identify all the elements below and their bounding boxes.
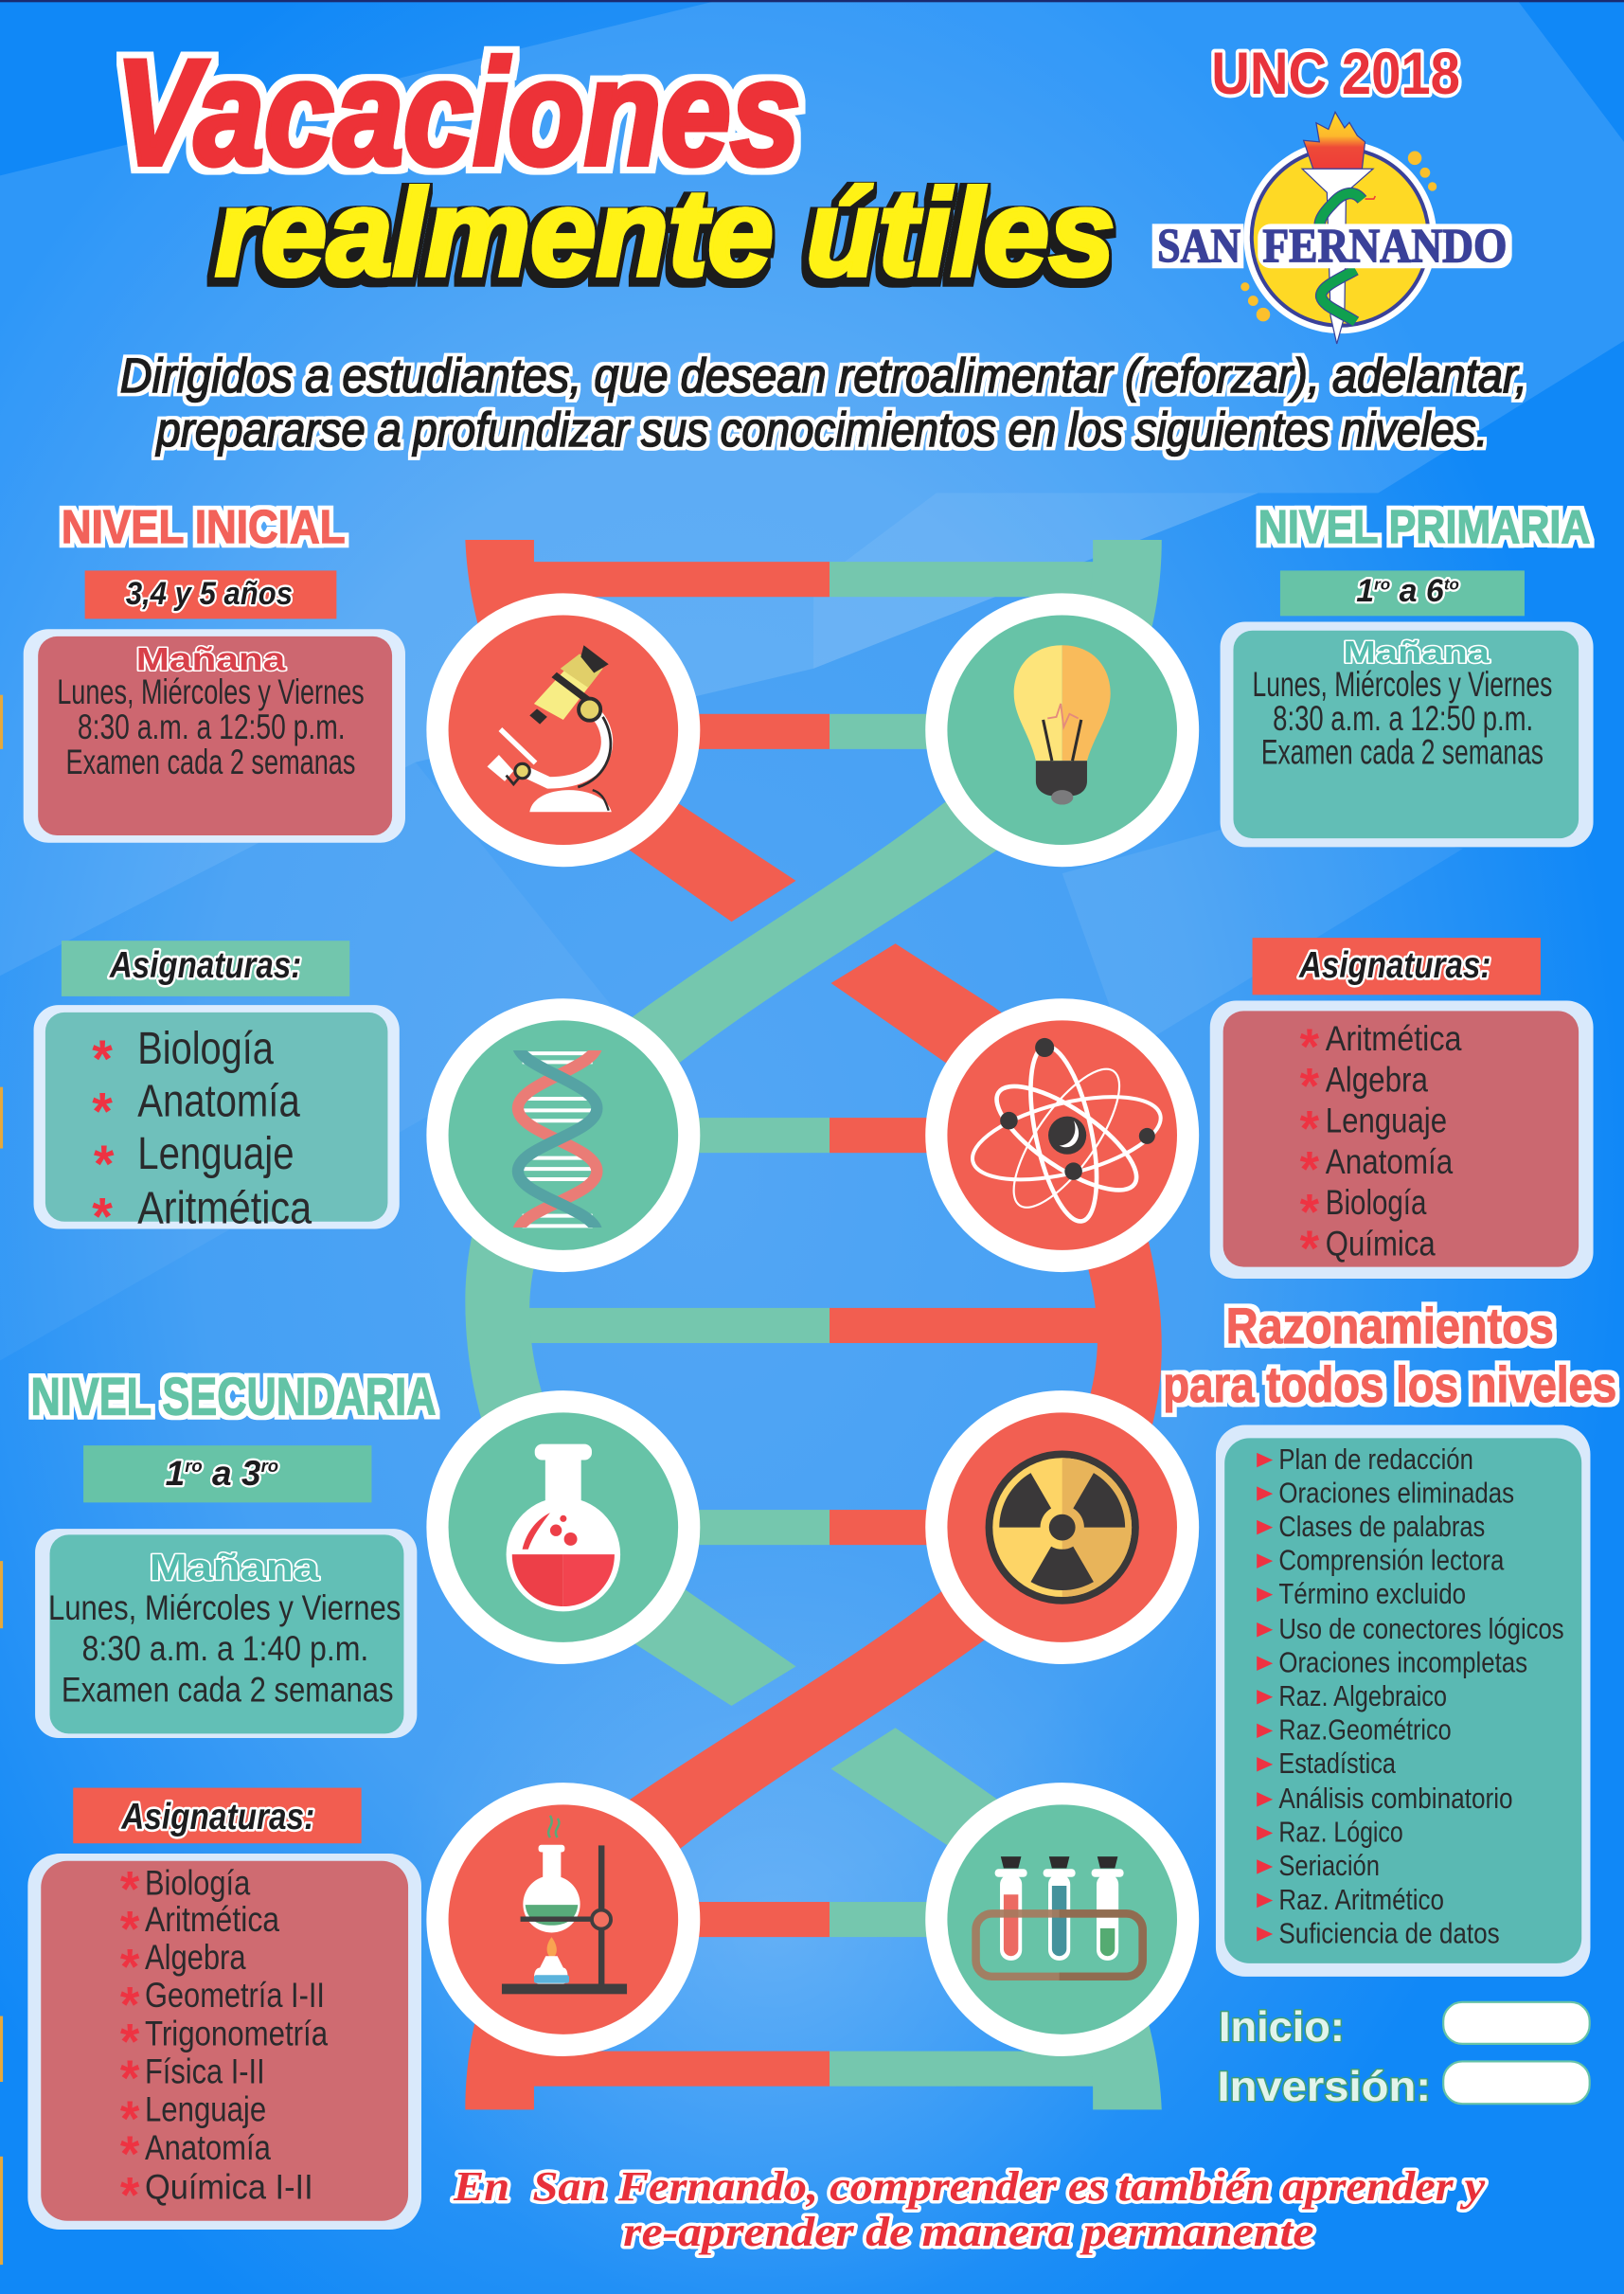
asignaturas band: Asignaturas: <box>120 1797 314 1837</box>
reasoning list card: Comprensión lectora <box>1278 1543 1505 1576</box>
schedule card: 8:30 a.m. a 12:50 p.m. <box>1273 698 1533 738</box>
grade band: ro <box>1374 575 1390 593</box>
icon: test tubes <box>937 1794 1188 2045</box>
subject list card: * <box>1300 1101 1320 1156</box>
age band: 3,4 y 5 años <box>126 576 293 612</box>
heading: razonamientos: Razonamientos <box>1226 1299 1554 1354</box>
schedule card <box>35 1529 417 1738</box>
panel: razonamientos <box>1163 1299 1616 1977</box>
panel: nivel primaria <box>1210 501 1594 1279</box>
logo: San Fernando: FERNANDO <box>1262 220 1507 273</box>
subject list card: Lenguaje <box>1326 1101 1447 1140</box>
schedule card: Examen cada 2 semanas <box>62 1669 394 1709</box>
asignaturas band <box>62 941 349 996</box>
icon: radiation <box>937 1402 1188 1653</box>
schedule card: Mañana <box>1343 636 1490 670</box>
age band <box>85 570 336 618</box>
title: Vacaciones: Vacaciones <box>116 29 800 196</box>
subject list card: * <box>1300 1185 1320 1240</box>
grade band: ro <box>261 1456 278 1476</box>
grade band: 1 <box>1356 573 1374 609</box>
subject list card: * <box>92 1030 113 1088</box>
reasoning list card: Oraciones eliminadas <box>1278 1476 1514 1509</box>
subject list card: Biología <box>137 1024 274 1074</box>
heading: nivel secundaria: NIVEL SECUNDARIA <box>30 1368 436 1426</box>
asignaturas band: Asignaturas: <box>109 945 301 986</box>
subject list card: Geometría I-II <box>145 1975 325 2015</box>
reasoning list card: Estadística <box>1278 1747 1397 1780</box>
reasoning list card: Raz. Aritmético <box>1278 1883 1444 1916</box>
subject list card: Aritmética <box>1326 1018 1462 1058</box>
asignaturas band <box>73 1788 362 1843</box>
title: realmente útiles: realmente útiles <box>215 165 1115 301</box>
icon: distillation setup <box>437 1794 689 2045</box>
reasoning list card: Plan de redacción <box>1278 1443 1473 1476</box>
subject list card: * <box>92 1082 113 1140</box>
reasoning list card: Uso de conectores lógicos <box>1278 1612 1564 1645</box>
subject list card: Anatomía <box>145 2127 271 2167</box>
subject list card: * <box>120 2168 140 2223</box>
heading: nivel inicial: NIVEL INICIAL <box>62 501 346 553</box>
subject list card: Física I-II <box>145 2052 265 2091</box>
icon: DNA <box>437 1010 689 1261</box>
schedule card: 8:30 a.m. a 12:50 p.m. <box>78 707 346 746</box>
grade band <box>1280 570 1525 616</box>
reasoning list card: Clases de palabras <box>1278 1510 1485 1543</box>
schedule card: Mañana <box>150 1548 319 1588</box>
subject list card: Lenguaje <box>137 1129 294 1179</box>
subject list card: * <box>1300 1019 1320 1075</box>
subject list card: Aritmética <box>145 1899 279 1939</box>
panel: nivel inicial <box>24 501 405 1246</box>
field: inversión <box>1217 2061 1590 2110</box>
reasoning list card <box>1216 1425 1590 1977</box>
subject list card: Algebra <box>1326 1059 1428 1099</box>
subject list card: * <box>1300 1142 1320 1198</box>
reasoning list card: Raz. Algebraico <box>1278 1679 1447 1712</box>
subtitle text: prepararse a profundizar sus conocimientos en los siguientes niveles. <box>155 403 1488 457</box>
reasoning list card: Seriación <box>1278 1849 1380 1882</box>
subject list card: * <box>120 2051 140 2106</box>
schedule card: Lunes, Miércoles y Viernes <box>48 1587 401 1627</box>
subject list card <box>27 1854 421 2230</box>
subject list card: Aritmética <box>137 1183 312 1233</box>
subject list card: Anatomía <box>137 1077 300 1127</box>
icon: atom <box>937 1010 1188 1261</box>
schedule card <box>1221 621 1594 847</box>
heading: UNC 2018: UNC 2018 <box>1211 41 1460 107</box>
schedule card: Lunes, Miércoles y Viernes <box>57 672 365 711</box>
field: inversión: Inversión: <box>1217 2063 1431 2110</box>
icon: microscope <box>437 604 689 856</box>
icon: light bulb <box>937 604 1188 856</box>
grade band: to <box>1444 575 1459 593</box>
asignaturas band: Asignaturas: <box>1298 945 1490 986</box>
subject list card: Anatomía <box>1326 1141 1454 1181</box>
reasoning list card: Término excluido <box>1278 1577 1466 1610</box>
field: inicio <box>1219 2002 1590 2051</box>
grade band: ro <box>185 1456 203 1476</box>
subject list card: * <box>120 1862 140 1918</box>
icon: flask <box>437 1402 689 1653</box>
grade band <box>83 1445 371 1502</box>
subject list card: Biología <box>145 1862 251 1902</box>
subject list card: Química I-II <box>145 2167 313 2207</box>
subject list card: * <box>120 1940 140 1996</box>
reasoning list card: Oraciones incompletas <box>1278 1646 1527 1679</box>
subject list card: Biología <box>1326 1182 1427 1222</box>
subject list card: * <box>120 1978 140 2034</box>
subject list card: * <box>120 2014 140 2070</box>
schedule card <box>24 629 405 843</box>
DNA double helix strands and rungs <box>465 540 1162 2109</box>
asignaturas band <box>1253 938 1541 995</box>
reasoning list card: Suficiencia de datos <box>1278 1916 1500 1949</box>
subject list card <box>34 1005 400 1246</box>
schedule card: 8:30 a.m. a 1:40 p.m. <box>82 1628 368 1668</box>
subject list card: * <box>92 1188 113 1246</box>
subtitle text: Dirigidos a estudiantes, que desean retroalimentar (reforzar), adelantar, <box>120 349 1527 403</box>
reasoning list card: Análisis combinatorio <box>1278 1782 1513 1815</box>
closing slogan: En San Fernando, comprender es también aprender y <box>453 2162 1486 2210</box>
heading: razonamientos <box>1163 1299 1616 1413</box>
subject list card: * <box>94 1135 115 1193</box>
closing slogan: re-aprender de manera permanente <box>623 2208 1313 2255</box>
grade band: a 6 <box>1390 573 1445 609</box>
closing slogan <box>453 2162 1486 2255</box>
subject list card: * <box>1300 1059 1320 1115</box>
subject list card: * <box>120 2126 140 2182</box>
subject list card: * <box>120 1901 140 1957</box>
reasoning list card: Raz. Lógico <box>1278 1816 1403 1849</box>
reasoning list card: Raz.Geométrico <box>1278 1713 1452 1747</box>
subject list card: Algebra <box>145 1937 246 1977</box>
subtitle text <box>120 349 1527 457</box>
subject list card <box>1210 1001 1594 1279</box>
field: inicio: Inicio: <box>1219 2003 1345 2051</box>
subject list card: Química <box>1326 1223 1436 1263</box>
panel: nivel secundaria <box>27 1368 436 2230</box>
subject list card: Trigonometría <box>145 2013 328 2052</box>
grade band: 1 <box>166 1453 185 1493</box>
schedule card: Examen cada 2 semanas <box>66 742 355 781</box>
subject list card: * <box>120 2091 140 2147</box>
subject list card: Lenguaje <box>145 2089 266 2129</box>
subject list card: * <box>1300 1221 1320 1277</box>
schedule card: Mañana <box>136 641 287 677</box>
logo: San Fernando <box>1152 112 1512 344</box>
logo: San Fernando: SAN <box>1157 220 1240 273</box>
grade band: a 3 <box>203 1453 261 1493</box>
